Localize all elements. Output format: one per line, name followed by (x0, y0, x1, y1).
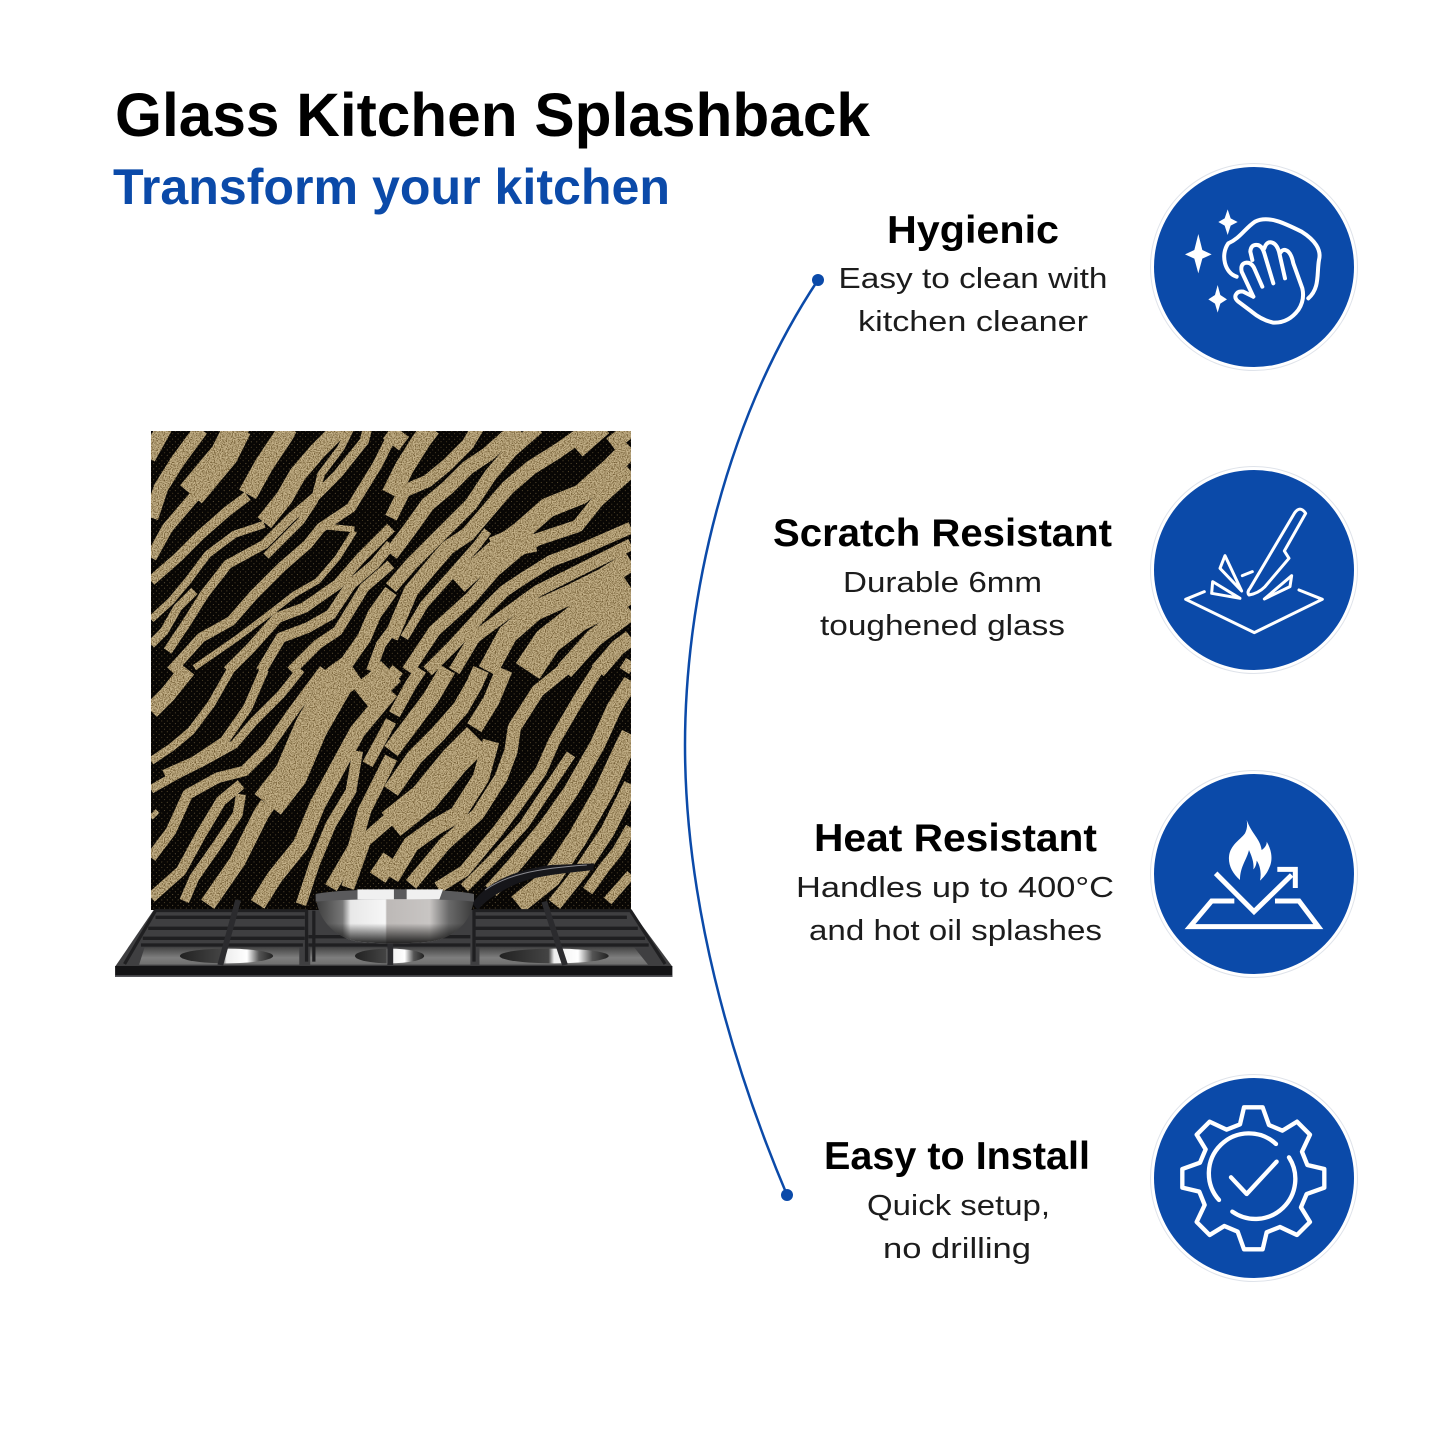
feature text: heat resistant: and hot oil splashes (809, 915, 1102, 947)
feature text: hygienic: Hygienic (887, 209, 1059, 252)
feature text: easy to install (824, 1135, 1090, 1265)
pan bowl (316, 891, 474, 943)
feature text: easy to install: Quick setup, (867, 1190, 1050, 1222)
pan support grates (125, 900, 665, 965)
feature text: hygienic (838, 209, 1108, 338)
feature text: scratch resistant: toughened glass (820, 610, 1065, 642)
feature text: hygienic: Easy to clean with (838, 263, 1108, 295)
pan handle (472, 863, 594, 910)
icon: knife scratching glass (1150, 466, 1358, 674)
feature text: easy to install: Easy to Install (824, 1135, 1090, 1178)
feature text: heat resistant: Heat Resistant (814, 817, 1097, 860)
icon: gear with check (1150, 1074, 1358, 1282)
connector dot top (812, 274, 824, 286)
front edge (115, 966, 672, 977)
feature text: scratch resistant (773, 512, 1112, 642)
title: Glass Kitchen Splashback (115, 81, 870, 149)
subtitle: Transform your kitchen (113, 159, 670, 215)
feature text: hygienic: kitchen cleaner (858, 306, 1088, 338)
icon: heat resistant flame (1150, 770, 1358, 978)
burners (180, 949, 609, 963)
pan rim (316, 889, 474, 902)
burner wells (139, 947, 648, 965)
feature text: scratch resistant: Durable 6mm (843, 567, 1042, 599)
gas hob with pan (115, 863, 672, 977)
connector dot bottom (781, 1189, 793, 1201)
connector curve (685, 274, 824, 1201)
feature text: scratch resistant: Scratch Resistant (773, 512, 1112, 555)
feature text: heat resistant: Handles up to 400°C (796, 872, 1114, 904)
splashback panel: zebra glitter glass (148, 428, 631, 910)
hob body (115, 910, 672, 967)
feature text: heat resistant (796, 817, 1114, 947)
icon: cleaning hand (1150, 164, 1358, 370)
feature text: easy to install: no drilling (883, 1233, 1031, 1265)
